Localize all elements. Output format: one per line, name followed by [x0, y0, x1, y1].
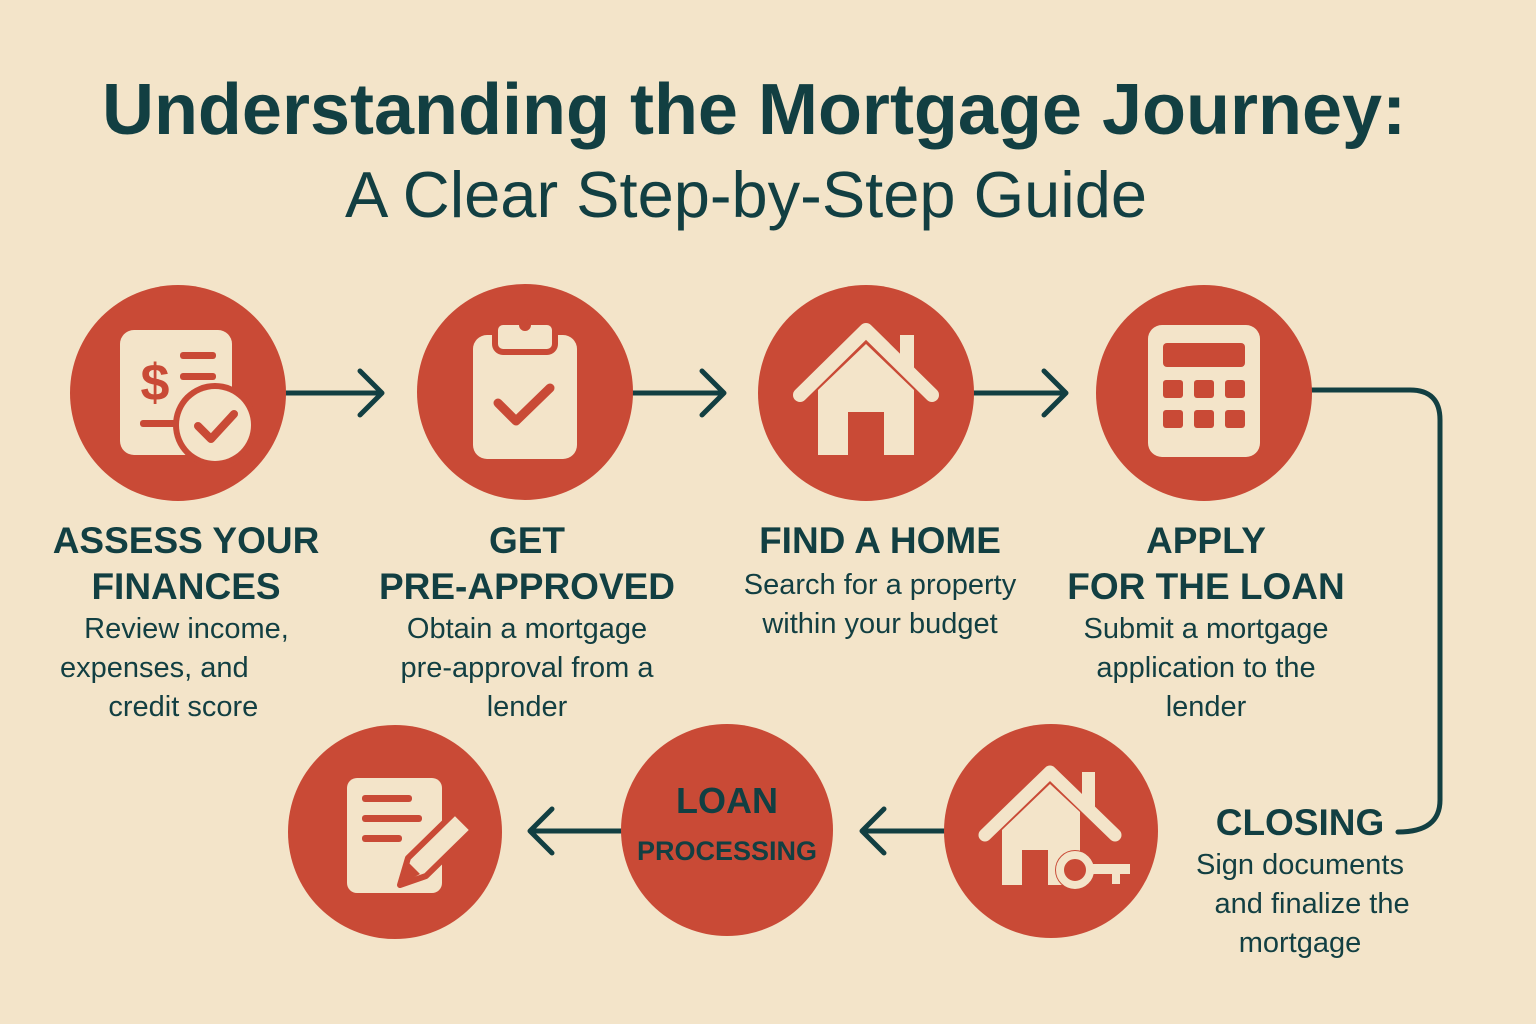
step 2 text	[379, 520, 675, 723]
step 1 icon: finances: $	[141, 354, 170, 412]
step 2 text: Obtain a mortgage	[407, 613, 647, 645]
title: Understanding the Mortgage Journey:	[102, 70, 1406, 150]
step 3 text	[744, 520, 1016, 640]
document sign icon	[288, 725, 502, 939]
step 4 text: Submit a mortgage	[1083, 613, 1328, 645]
subtitle: A Clear Step-by-Step Guide	[345, 158, 1147, 231]
loan processing circle	[621, 724, 833, 936]
step 4 text: FOR THE LOAN	[1067, 566, 1345, 607]
closing text: CLOSING	[1216, 802, 1384, 843]
step 1 text: ASSESS YOUR	[53, 520, 319, 561]
closing text	[1196, 802, 1410, 959]
loan processing circle: LOAN	[676, 780, 778, 821]
step 3 text: FIND A HOME	[759, 520, 1001, 561]
loan processing circle: PROCESSING	[637, 836, 817, 866]
closing text: Sign documents	[1196, 849, 1404, 881]
step 4 text: application to the	[1096, 652, 1316, 684]
step 1 text	[53, 520, 319, 723]
closing text: mortgage	[1239, 927, 1361, 959]
step 1 text: Review income,	[84, 613, 289, 645]
step 2 text: pre-approval from a	[400, 652, 654, 684]
step 4 icon: calculator	[1096, 285, 1312, 501]
step 1 text: credit score	[108, 691, 258, 723]
step 4 text	[1067, 520, 1345, 723]
step 3 text: within your budget	[762, 608, 998, 640]
closing icon: house with key	[944, 724, 1158, 938]
step 1 text: FINANCES	[91, 566, 281, 607]
step 2 icon: clipboard	[417, 284, 633, 500]
step 4 text: lender	[1166, 691, 1246, 723]
step 2 text: lender	[487, 691, 567, 723]
step 2 text: PRE-APPROVED	[379, 566, 675, 607]
step 3 text: Search for a property	[744, 569, 1016, 601]
step 3 icon: house	[758, 285, 974, 501]
step 4 text: APPLY	[1146, 520, 1266, 561]
closing text: and finalize the	[1215, 888, 1410, 920]
step 1 icon: finances	[70, 285, 286, 501]
step 1 text: expenses, and	[60, 652, 249, 684]
connectors	[286, 371, 1440, 853]
step 2 text: GET	[489, 520, 565, 561]
